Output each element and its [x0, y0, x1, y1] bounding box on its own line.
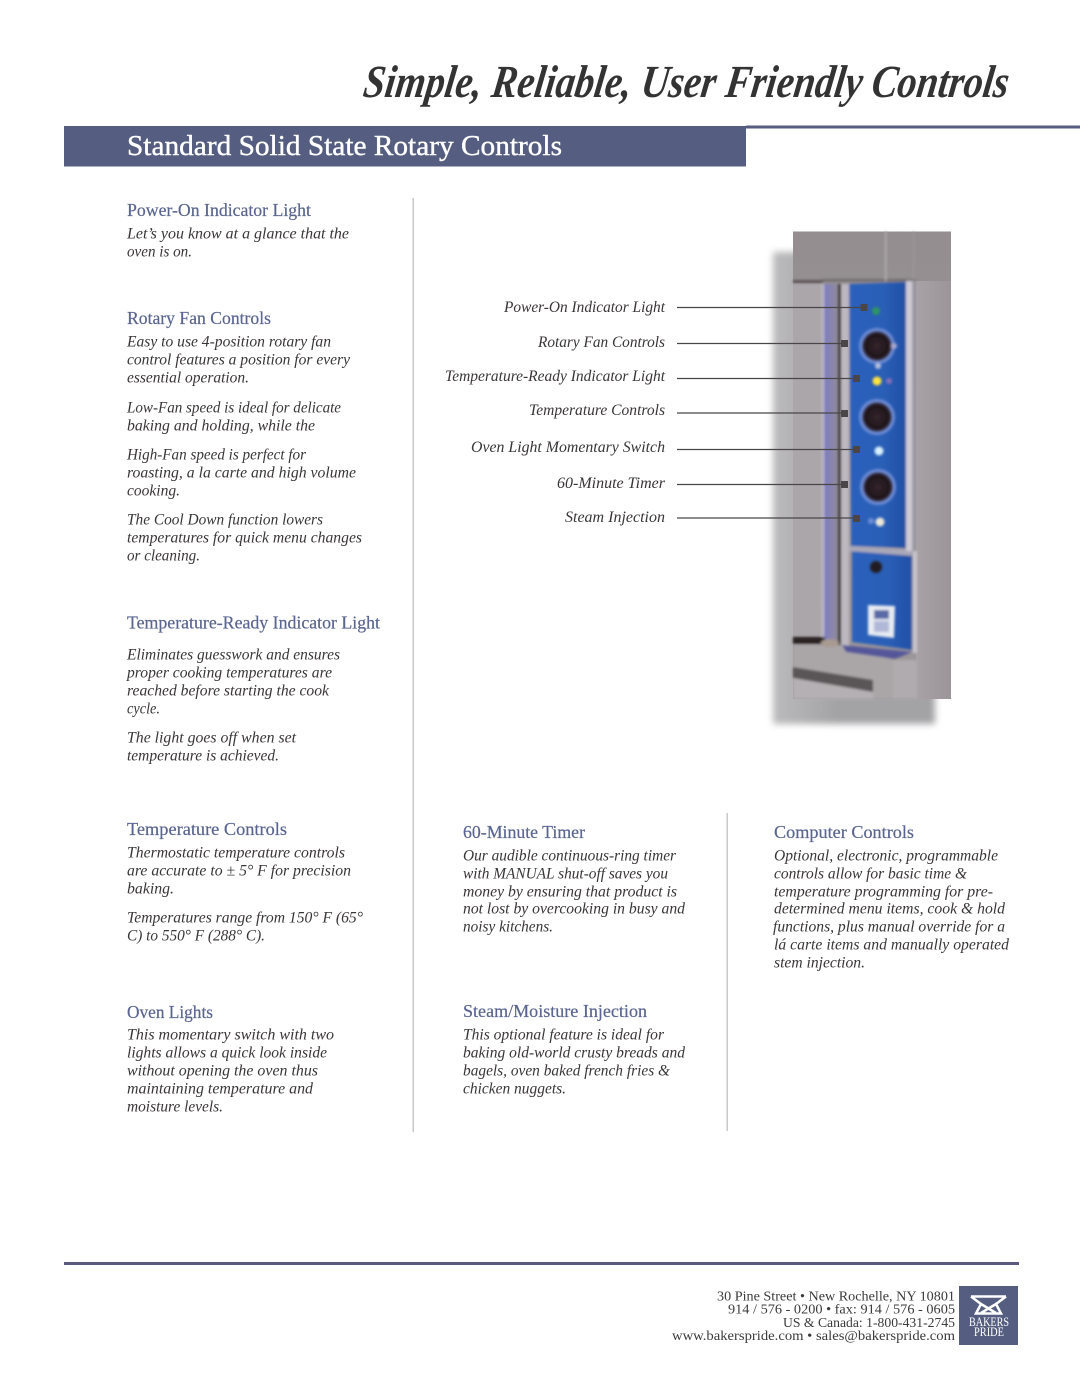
text block: steam/moisture injection: Steam/Moisture Injection: [463, 1001, 647, 1021]
text block: computer controls: determined menu items, cook & hold: [774, 900, 1006, 918]
text block: rotary fan controls: temperatures for quick menu changes: [127, 530, 362, 546]
callout labels: Steam Injection: [565, 509, 665, 526]
footer contact details: US & Canada: 1-800-431-2745: [783, 1315, 955, 1330]
text block: temperature-ready indicator light: temperature is achieved.: [127, 748, 279, 764]
text block: oven lights: [127, 1002, 334, 1116]
text block: rotary fan controls: baking and holding, while the: [127, 418, 315, 434]
text block: oven lights: lights allows a quick look inside: [127, 1044, 327, 1062]
section heading: Standard Solid State Rotary Controls: [127, 131, 562, 162]
text block: 60-minute timer: money by ensuring that product is: [463, 884, 677, 900]
text block: oven lights: Oven Lights: [127, 1002, 213, 1022]
text block: 60-minute timer: 60-Minute Timer: [463, 822, 585, 842]
logo: bakers pride: BAKERS: [969, 1315, 1009, 1329]
text block: steam/moisture injection: This optional feature is ideal for: [463, 1026, 665, 1044]
text block: 60-minute timer: with MANUAL shut-off saves you: [463, 866, 668, 882]
callout labels: 60-Minute Timer: [557, 475, 666, 492]
text block: computer controls: [773, 822, 1010, 972]
text block: steam/moisture injection: baking old-world crusty breads and: [463, 1044, 686, 1062]
callout labels: Temperature-Ready Indicator Light: [445, 368, 666, 385]
temperature-ready light: [872, 376, 892, 386]
rotary fan knob: [859, 328, 897, 369]
footer contact details: [672, 1288, 956, 1343]
text block: temperature-ready indicator light: reached before starting the cook: [127, 682, 330, 700]
text block: rotary fan controls: roasting, a la carte and high volume: [127, 464, 356, 482]
text block: rotary fan controls: [126, 308, 362, 564]
text block: temperature-ready indicator light: [126, 612, 380, 764]
text block: temperature-ready indicator light: cycle.: [127, 700, 160, 718]
text block: computer controls: temperature programming for pre-: [774, 884, 993, 900]
text block: 60-minute timer: [463, 822, 686, 936]
callout labels: [445, 299, 666, 526]
text block: power-on indicator light: [126, 200, 349, 260]
callout labels: Power-On Indicator Light: [503, 299, 666, 316]
text block: temperature-ready indicator light: Eliminates guesswork and ensures: [126, 646, 340, 664]
callout labels: Rotary Fan Controls: [537, 334, 665, 351]
lower panel button: [870, 561, 882, 573]
text block: oven lights: This momentary switch with two: [127, 1026, 334, 1044]
text block: temperature controls: are accurate to ± 5° F for precision: [127, 862, 351, 880]
text block: temperature controls: [127, 819, 364, 944]
text block: temperature-ready indicator light: The light goes off when set: [127, 730, 297, 746]
text block: rotary fan controls: essential operation.: [127, 370, 249, 386]
text block: rotary fan controls: Low-Fan speed is ideal for delicate: [126, 400, 341, 416]
text block: rotary fan controls: cooking.: [127, 482, 180, 500]
text block: power-on indicator light: Power-On Indicator Light: [127, 200, 311, 220]
text block: oven lights: without opening the oven thus: [127, 1062, 318, 1080]
text block: computer controls: stem injection.: [774, 954, 865, 972]
text block: temperature controls: Temperature Controls: [127, 819, 287, 839]
callout leader lines: [677, 304, 868, 522]
text block: oven lights: moisture levels.: [127, 1098, 223, 1116]
text block: power-on indicator light: Let’s you know at a glance that the: [126, 226, 349, 242]
steam injection button: [868, 518, 884, 526]
oven control panel photo: [773, 231, 951, 724]
timer knob: [860, 469, 896, 505]
logo: bakers pride: PRIDE: [974, 1325, 1004, 1339]
text block: computer controls: lá carte items and manually operated: [774, 936, 1010, 954]
text block: steam/moisture injection: [463, 1001, 686, 1098]
oven light switch: [874, 446, 884, 456]
text block: 60-minute timer: noisy kitchens.: [463, 918, 553, 936]
power-on light: [872, 307, 880, 315]
callout labels: Oven Light Momentary Switch: [471, 439, 665, 456]
temperature knob: [859, 399, 895, 435]
text block: 60-minute timer: Our audible continuous-ring timer: [463, 848, 677, 864]
text block: oven lights: maintaining temperature and: [127, 1080, 314, 1098]
footer rule: [64, 1262, 1019, 1265]
text block: steam/moisture injection: chicken nuggets.: [463, 1080, 566, 1098]
text block: rotary fan controls: control features a position for every: [127, 352, 351, 368]
header band: [64, 126, 1080, 166]
text block: computer controls: Computer Controls: [774, 822, 914, 842]
text block: temperature-ready indicator light: proper cooking temperatures are: [126, 664, 332, 682]
text block: computer controls: controls allow for basic time &: [774, 866, 968, 882]
text block: computer controls: Optional, electronic, programmable: [774, 848, 998, 864]
text block: temperature controls: baking.: [127, 880, 174, 898]
column dividers: [412, 198, 728, 1132]
text block: rotary fan controls: The Cool Down function lowers: [127, 512, 323, 528]
text block: computer controls: functions, plus manual override for a: [773, 918, 1005, 936]
text block: rotary fan controls: High-Fan speed is perfect for: [126, 446, 307, 464]
text block: steam/moisture injection: bagels, oven baked french fries &: [463, 1062, 671, 1080]
callout labels: Temperature Controls: [529, 402, 665, 419]
text block: temperature controls: C) to 550° F (288° C).: [127, 928, 265, 944]
logo: bakers pride: [959, 1286, 1018, 1345]
text block: power-on indicator light: oven is on.: [127, 244, 192, 260]
footer contact details: 914 / 576 - 0200 • fax: 914 / 576 - 0605: [728, 1302, 955, 1316]
text block: temperature controls: Temperatures range from 150° F (65°: [127, 910, 364, 926]
text block: temperature-ready indicator light: Temperature-Ready Indicator Light: [127, 612, 380, 632]
text block: rotary fan controls: Rotary Fan Controls: [127, 308, 271, 328]
footer contact details: www.bakerspride.com • sales@bakerspride.com: [672, 1328, 956, 1343]
text block: 60-minute timer: not lost by overcooking in busy and: [463, 900, 686, 918]
panel badge: [868, 605, 895, 638]
text block: rotary fan controls: or cleaning.: [127, 548, 200, 564]
text block: temperature controls: Thermostatic temperature controls: [127, 844, 345, 862]
footer contact details: 30 Pine Street • New Rochelle, NY 10801: [717, 1288, 955, 1304]
text block: rotary fan controls: Easy to use 4-position rotary fan: [126, 334, 331, 350]
